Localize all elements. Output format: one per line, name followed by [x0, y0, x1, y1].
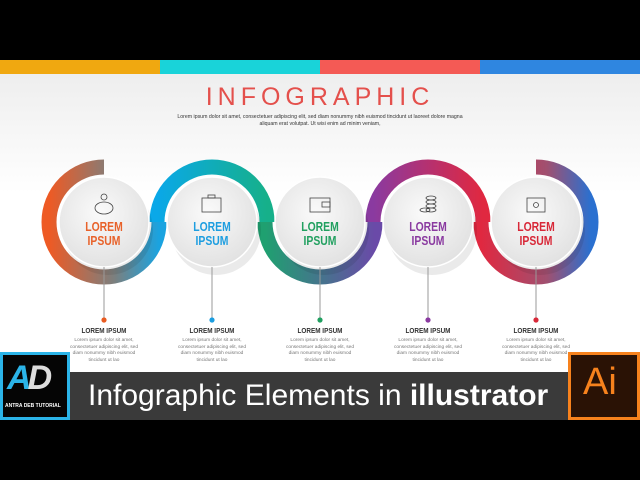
text: LOREM IPSUM [190, 326, 234, 335]
text: IPSUM [412, 233, 444, 248]
circle labels: IPSUM [88, 233, 120, 248]
AD logo [0, 352, 70, 420]
text: LOREM IPSUM [406, 326, 450, 335]
AD logo: AD [7, 359, 48, 397]
step texts: LOREM IPSUM [82, 326, 126, 335]
connectors [104, 267, 536, 320]
white content area [0, 74, 640, 372]
AD logo: ANTRA DEB TUTORIAL [5, 403, 61, 409]
text: LOREM [193, 219, 231, 234]
Ai logo [568, 352, 640, 420]
text: IPSUM [304, 233, 336, 248]
icons [95, 194, 545, 214]
Ai logo: Ai [583, 361, 617, 403]
text: IPSUM [520, 233, 552, 248]
text: Lorem ipsum dolor sit amet, consectetuer adipiscing elit, sed diam nonummy nibh euismod tincidunt ut lao [70, 338, 138, 362]
text: LOREM [517, 219, 555, 234]
banner: Infographic Elements in illustrator [88, 379, 548, 412]
text: Lorem ipsum dolor sit amet, consectetuer adipiscing elit, sed diam nonummy nibh euismod tincidunt ut lao [286, 338, 354, 362]
subtitle text: Lorem ipsum dolor sit amet, consectetuer adipiscing elit, sed diam nonummy nibh euismod tincidunt ut laoreet dolore magna aliquam erat volutpat. Ut wisi enim ad minim veniam, [177, 114, 463, 127]
color bar [0, 60, 640, 74]
text: LOREM [301, 219, 339, 234]
text: LOREM [409, 219, 447, 234]
banner [0, 372, 640, 420]
text: Lorem ipsum dolor sit amet, consectetuer adipiscing elit, sed diam nonummy nibh euismod tincidunt ut lao [502, 338, 570, 362]
text: LOREM IPSUM [514, 326, 558, 335]
dots [101, 317, 539, 323]
title: INFOGRAPHIC [206, 83, 434, 111]
text: Lorem ipsum dolor sit amet, consectetuer adipiscing elit, sed diam nonummy nibh euismod tincidunt ut lao [394, 338, 462, 362]
text: Lorem ipsum dolor sit amet, consectetuer adipiscing elit, sed diam nonummy nibh euismod tincidunt ut lao [178, 338, 246, 362]
text: LOREM IPSUM [298, 326, 342, 335]
ribbon segments [49, 167, 591, 277]
text: IPSUM [196, 233, 228, 248]
circle labels: LOREM [85, 219, 123, 234]
circles [59, 177, 585, 275]
circle labels [85, 219, 123, 248]
